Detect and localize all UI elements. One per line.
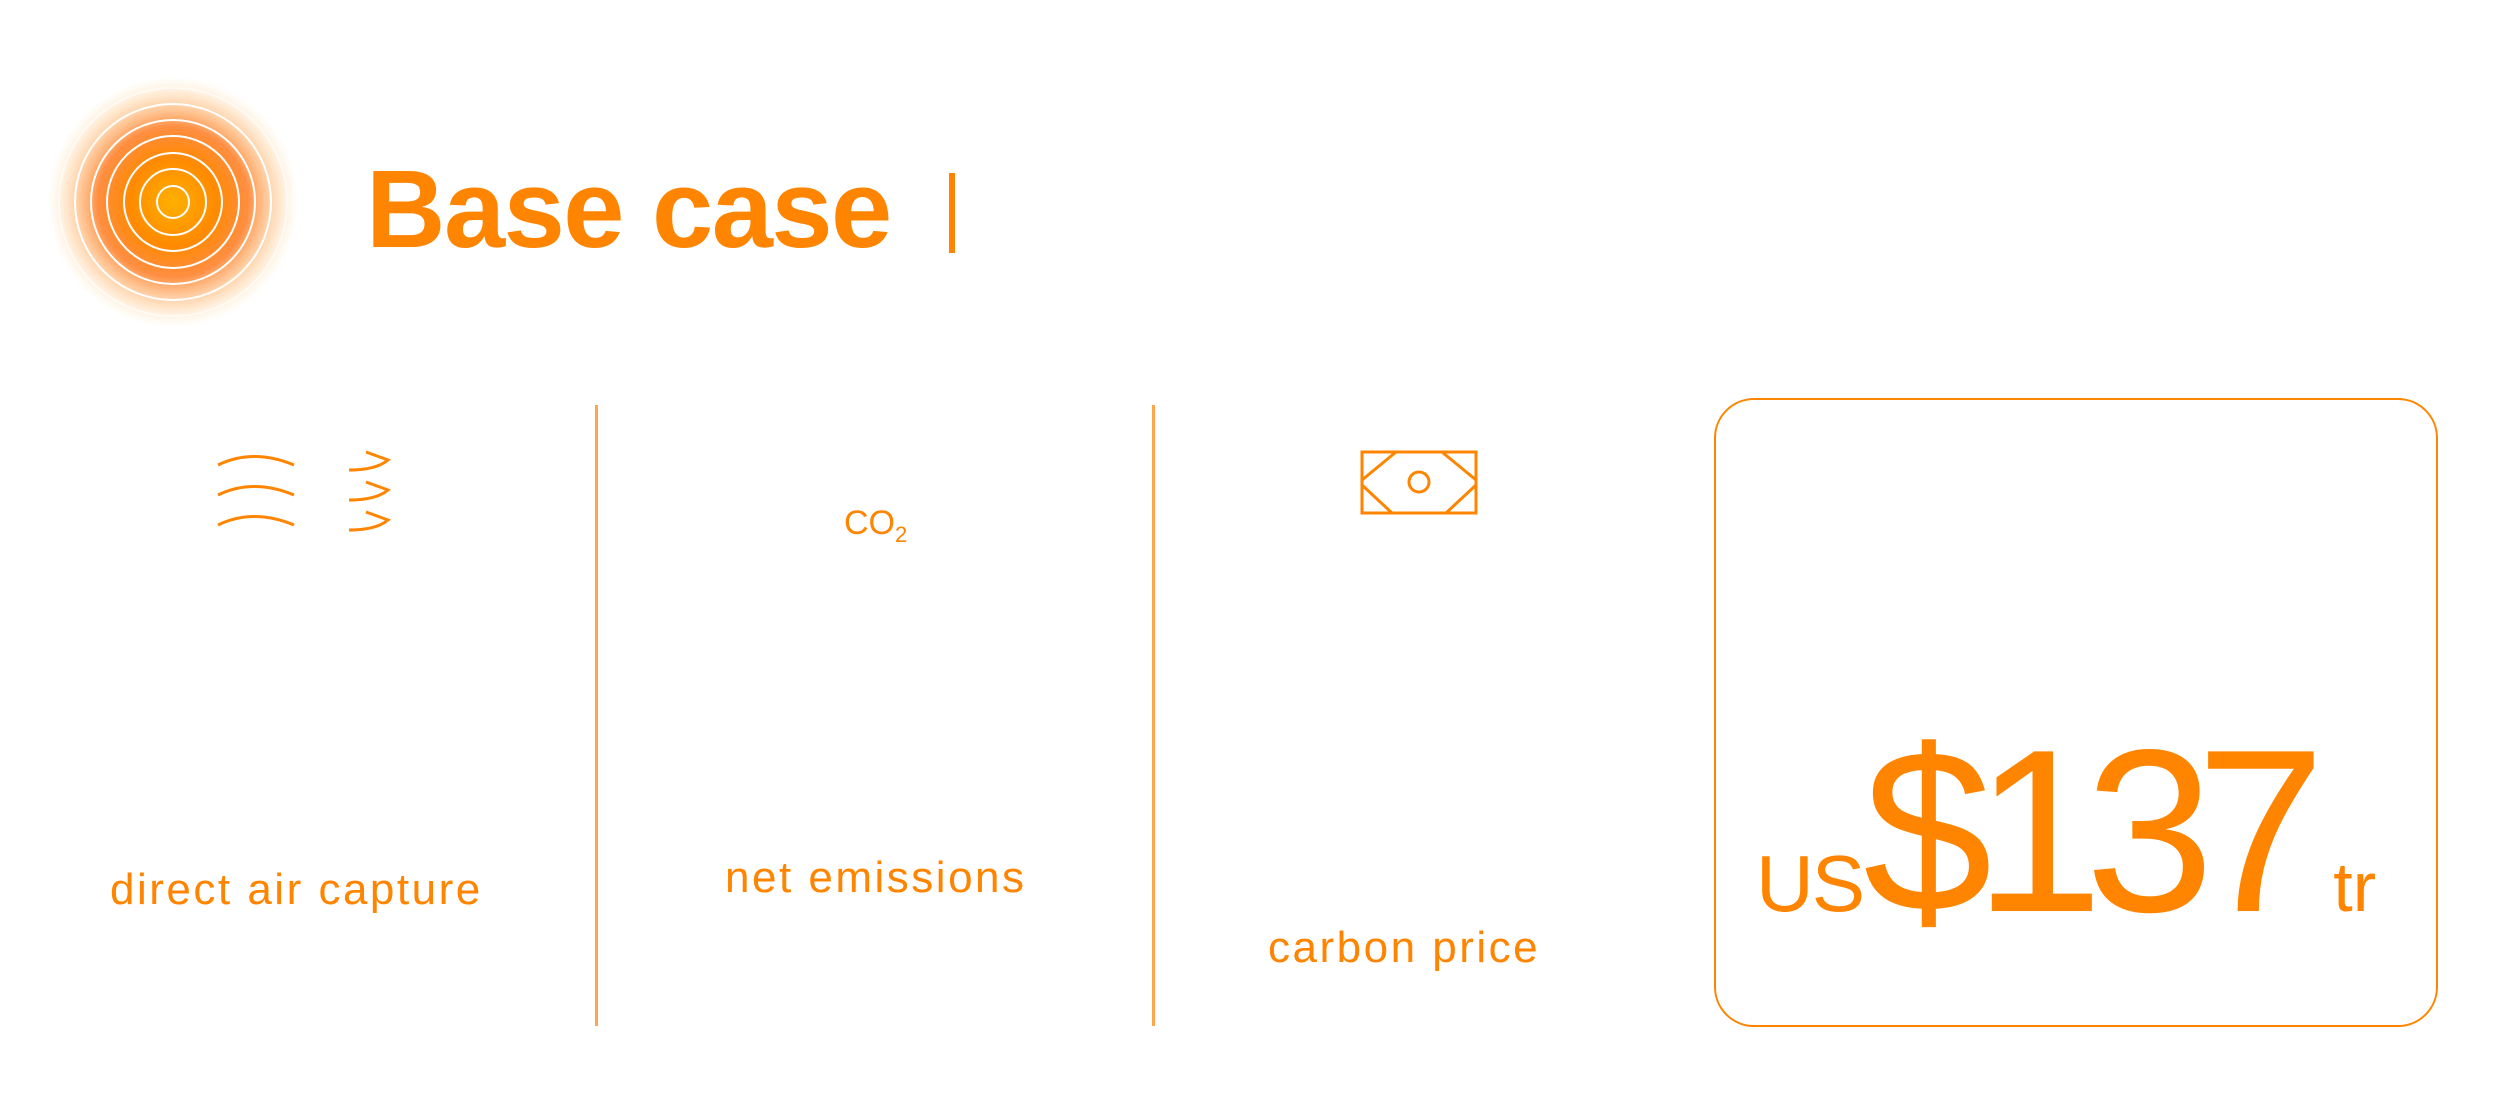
divider 2: [1152, 405, 1155, 1026]
panel: net emissions: [725, 504, 1027, 902]
icon: radial target logo: [52, 80, 294, 324]
label: carbon price: carbon price: [1268, 923, 1540, 972]
icon: banknote: [1360, 450, 1478, 514]
divider 1: [595, 405, 598, 1026]
panel: carbon price: [1268, 450, 1540, 972]
callout box: US$137 tr: [1714, 398, 2438, 1027]
icon: air flow: [217, 450, 391, 532]
label: net emissions: net emissions: [725, 853, 1027, 902]
label: direct air capture: direct air capture: [110, 865, 483, 914]
title: Base case: [366, 148, 891, 271]
panel: direct air capture: [110, 450, 483, 914]
cursor bar: [949, 173, 955, 253]
big number: US$137 tr: [1756, 702, 2376, 961]
icon: CO2: CO2: [844, 504, 907, 547]
